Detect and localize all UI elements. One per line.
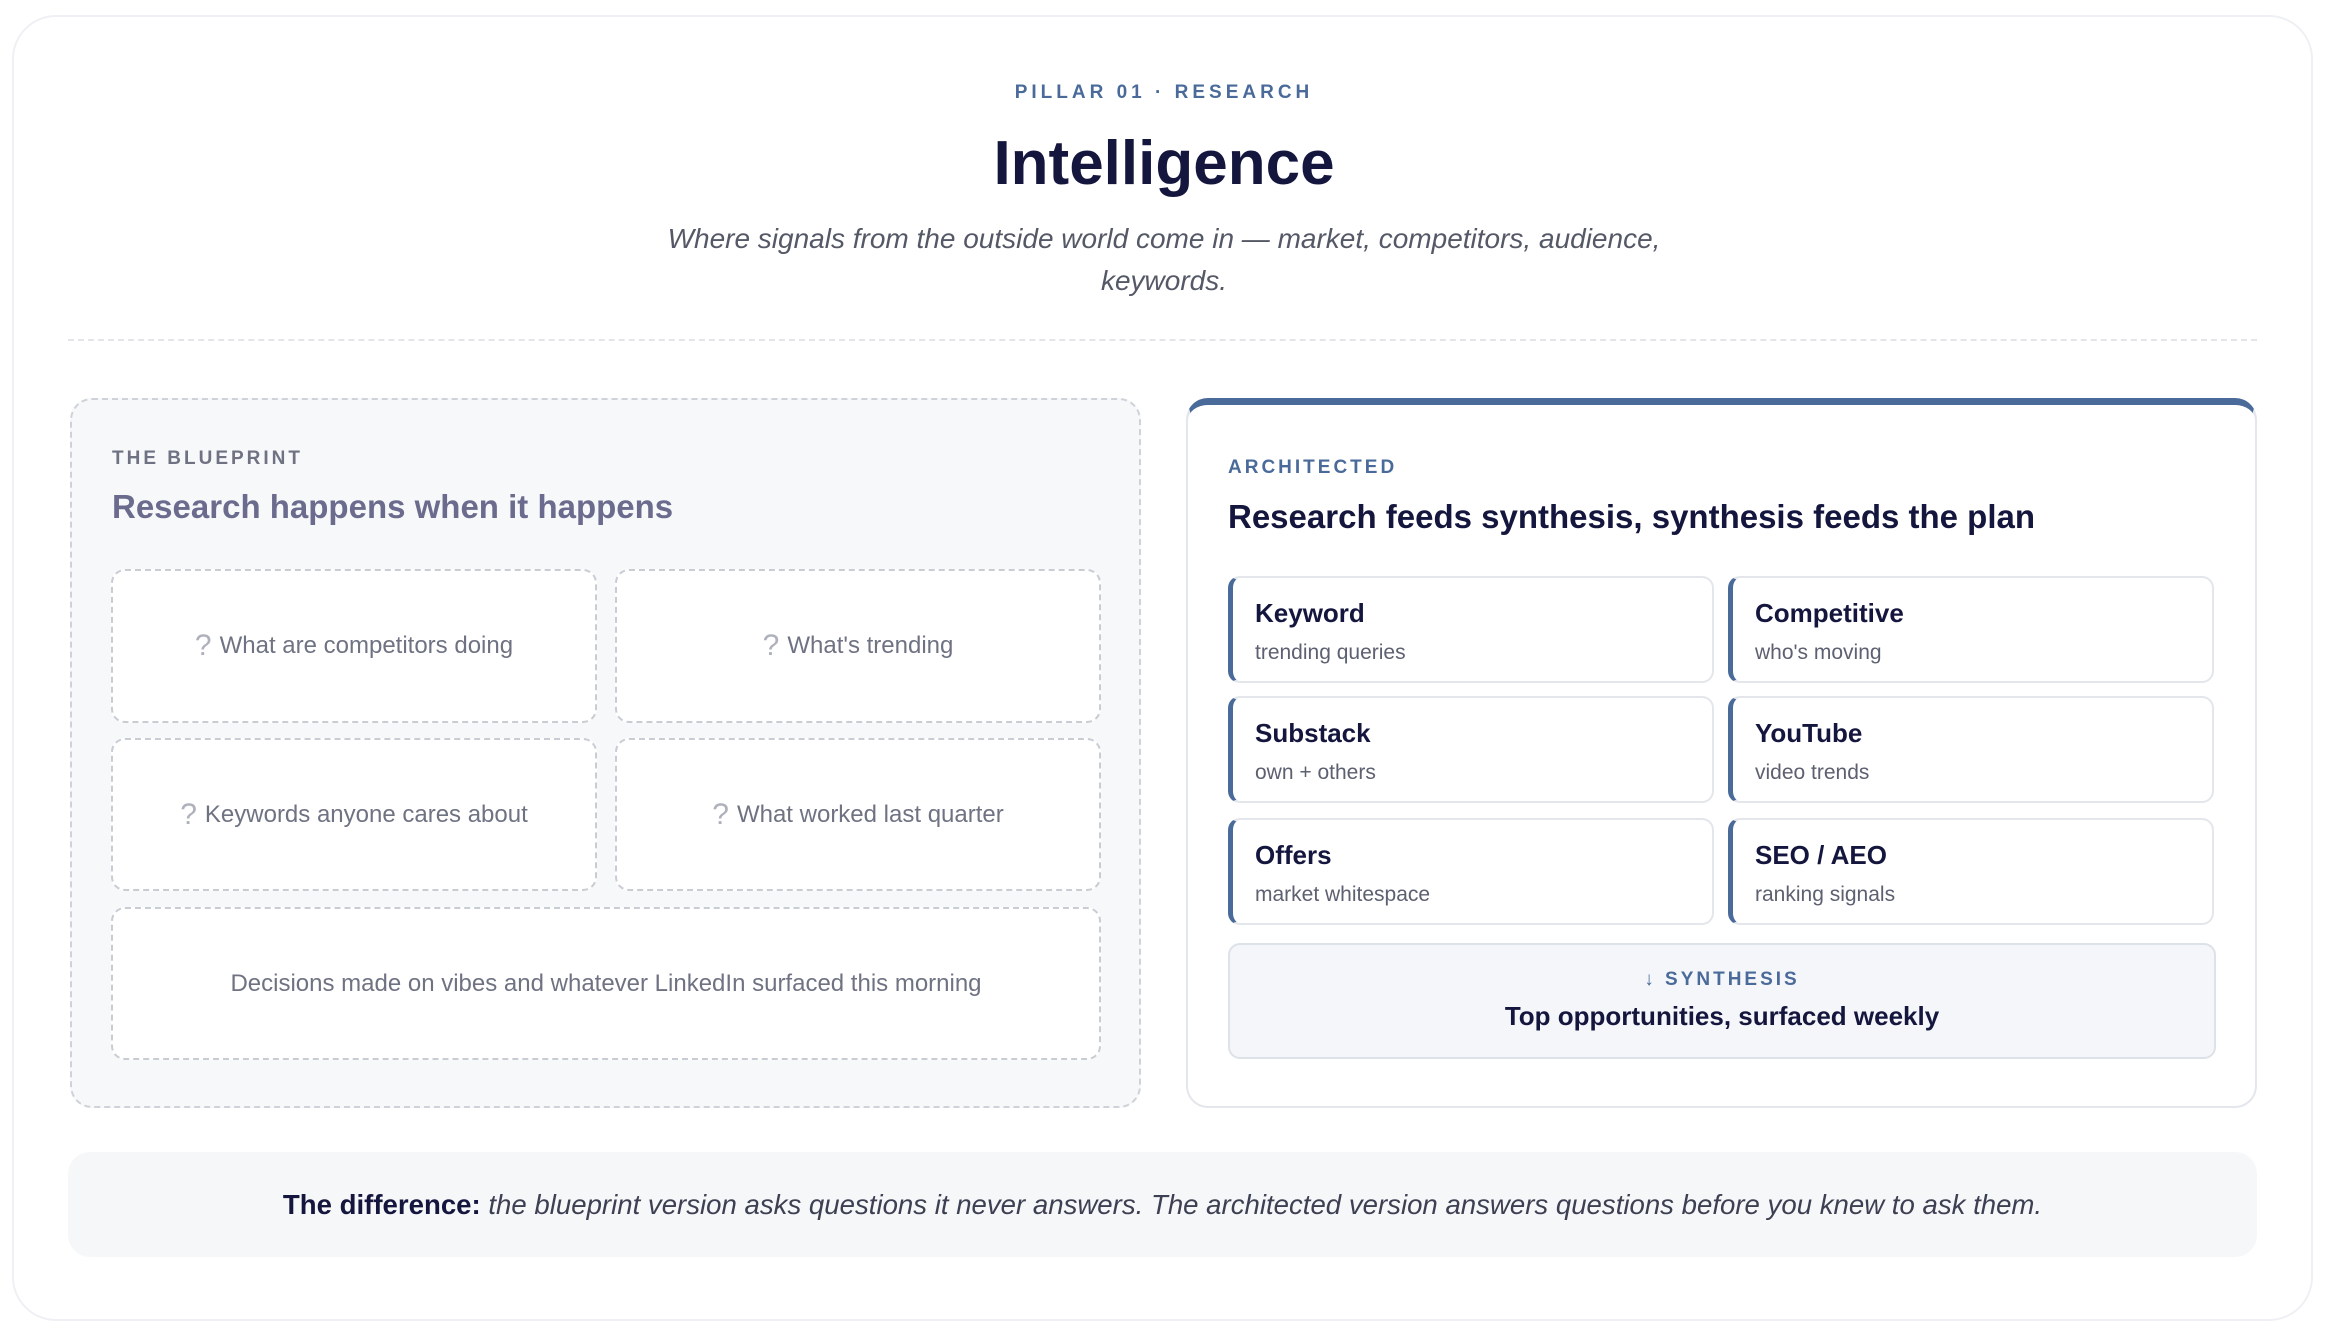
- card: seo: [1728, 818, 2214, 925]
- card: offers: market whitespace: [1255, 883, 1430, 906]
- question box 3: [111, 738, 597, 891]
- panel: blueprint: [70, 398, 1141, 1108]
- question box 1: [111, 569, 597, 723]
- card: youtube: video trends: [1755, 761, 1869, 784]
- subtitle: Where signals from the outside world come in — market, competitors, audience, keywords.: [668, 223, 1660, 296]
- title: Intelligence: [993, 129, 1335, 198]
- card: seo: ranking signals: [1755, 883, 1895, 906]
- callout: the difference: The difference: the blueprint version asks questions it never answers. The architected version answers questions before you knew to ask them.: [283, 1189, 2042, 1220]
- card: competitive: [1728, 576, 2214, 683]
- question box 4: ?: [712, 798, 729, 830]
- card: offers: Offers: [1255, 840, 1332, 870]
- callout: the difference: [68, 1152, 2257, 1257]
- architected label: ARCHITECTED: [1228, 457, 1397, 478]
- card: competitive: Competitive: [1755, 598, 1904, 628]
- card: seo: SEO / AEO: [1755, 840, 1887, 870]
- card: youtube: YouTube: [1755, 718, 1862, 748]
- synthesis box: [1228, 943, 2216, 1059]
- synthesis box: ↓ SYNTHESIS: [1644, 969, 1800, 990]
- question box 2: ?: [763, 629, 779, 662]
- card: keyword: trending queries: [1255, 641, 1406, 664]
- card: substack: Substack: [1255, 718, 1371, 748]
- architected heading: Research feeds synthesis, synthesis feeds the plan: [1228, 498, 2035, 535]
- panel: architected: [1186, 398, 2257, 1108]
- question box 2: [615, 569, 1101, 723]
- card: substack: own + others: [1255, 761, 1376, 784]
- card: keyword: [1228, 576, 1714, 683]
- card: competitive: who's moving: [1755, 641, 1882, 664]
- question box 1: ?: [195, 629, 212, 662]
- card: substack: [1228, 696, 1714, 803]
- question box 4: What worked last quarter: [737, 800, 1004, 828]
- synthesis box: Top opportunities, surfaced weekly: [1505, 1001, 1939, 1031]
- card: youtube: [1728, 696, 2214, 803]
- eyebrow label: PILLAR 01 · RESEARCH: [1015, 82, 1313, 103]
- card: keyword: Keyword: [1255, 598, 1365, 628]
- vibes box: [111, 907, 1101, 1060]
- question box 1: What are competitors doing: [220, 632, 513, 659]
- question box 3: ?: [180, 798, 197, 830]
- question box 4: [615, 738, 1101, 891]
- question box 2: What's trending: [787, 632, 953, 659]
- question box 3: Keywords anyone cares about: [205, 800, 528, 828]
- blueprint label: THE BLUEPRINT: [112, 448, 303, 469]
- blueprint heading: Research happens when it happens: [112, 488, 673, 525]
- card: offers: [1228, 818, 1714, 925]
- vibes box: Decisions made on vibes and whatever LinkedIn surfaced this morning: [230, 970, 982, 996]
